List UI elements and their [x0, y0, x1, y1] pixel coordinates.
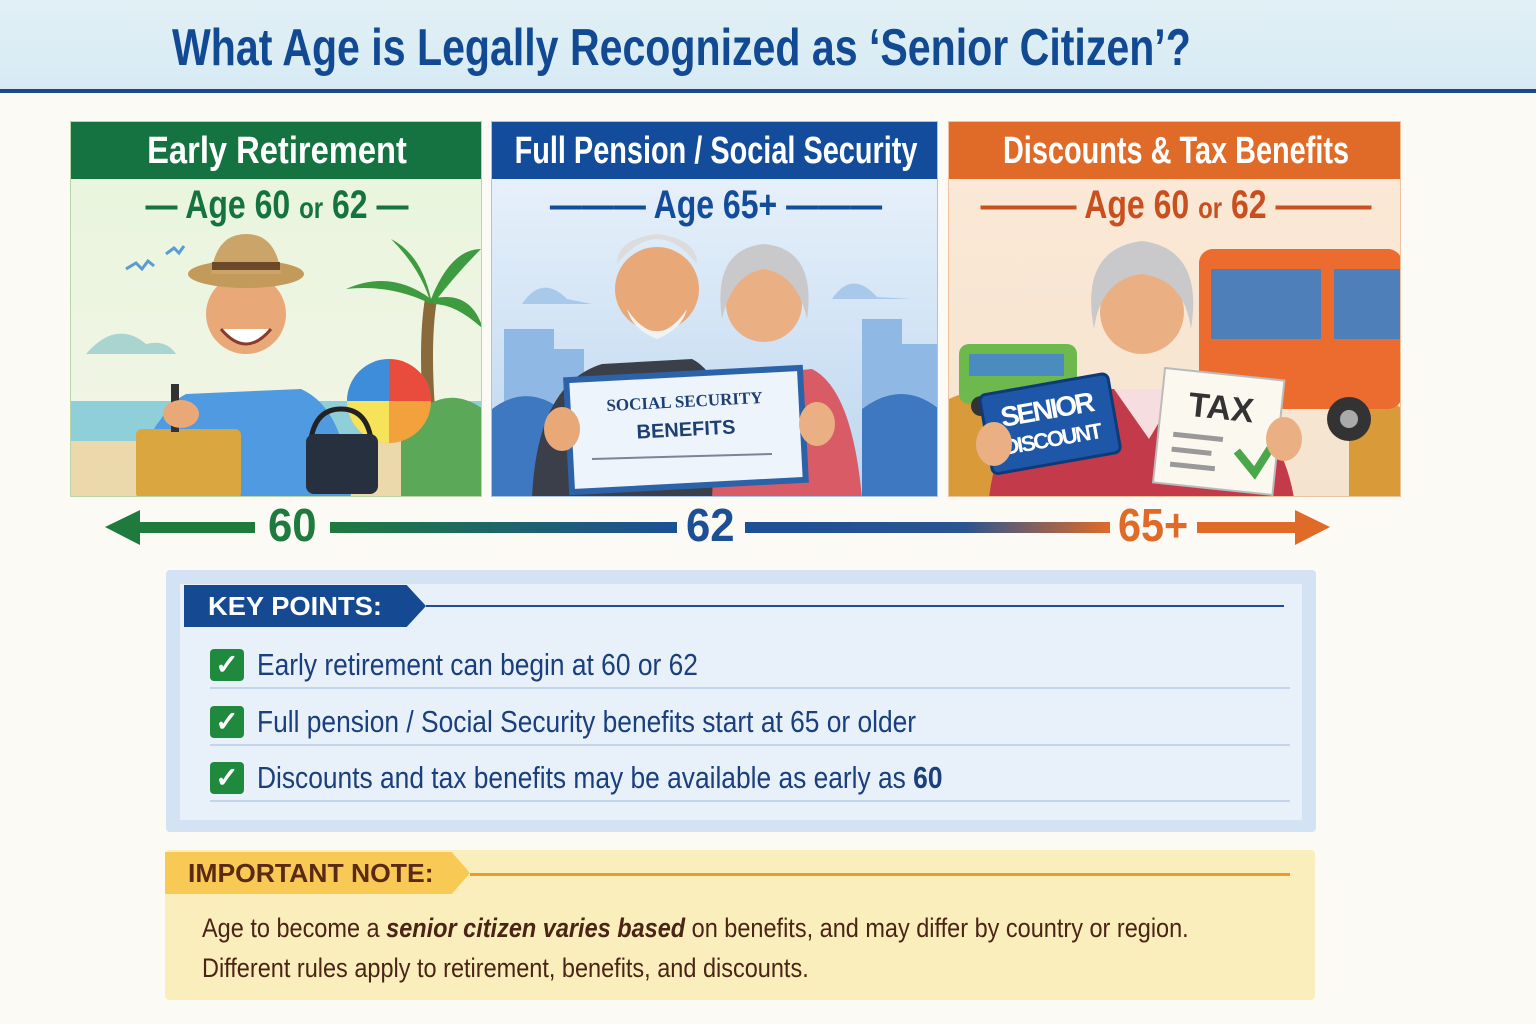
key point 2: ✓: [215, 706, 239, 737]
illustration: beach retiree: [71, 179, 481, 496]
timeline arrow: [105, 499, 1330, 551]
note text: Age to become a senior citizen varies based on benefits, and may differ by country or region.: [202, 913, 1189, 943]
illustration: senior discount: SENIOR: [998, 386, 1097, 433]
key points tab: KEY POINTS:: [208, 591, 382, 621]
heading: early retirement: [71, 122, 483, 179]
illustration: senior discount: [949, 179, 1400, 496]
heading: full pension: [492, 122, 939, 179]
header band: [0, 0, 1536, 93]
heading: discounts: Discounts & Tax Benefits: [1002, 130, 1349, 172]
heading: full pension: Full Pension / Social Security: [514, 130, 917, 172]
key point 2: Full pension / Social Security benefits start at 65 or older: [257, 704, 916, 739]
subheading: age 60 or 62: — Age 60 or 62 —: [146, 183, 408, 227]
key point 1: [210, 647, 1290, 689]
label: 62: 62: [686, 499, 735, 551]
key point 2: [210, 704, 1290, 746]
note text: Different rules apply to retirement, benefits, and discounts.: [202, 953, 809, 983]
key point 3: [210, 760, 1290, 802]
key point 1: ✓: [215, 649, 239, 680]
note tab: IMPORTANT NOTE:: [188, 858, 434, 888]
panel: important note: [165, 850, 1315, 1000]
panel: discounts: [948, 121, 1401, 497]
key points tab: [184, 585, 426, 627]
note text: [202, 913, 1189, 983]
panel: full pension: [491, 121, 938, 497]
illustration: senior discount: DISCOUNT: [1001, 418, 1105, 460]
key point 3: ✓: [215, 762, 239, 793]
illustration: couple with benefits: SOCIAL SECURITY: [606, 388, 763, 415]
label: 60: 60: [268, 499, 317, 551]
illustration: couple with benefits: BENEFITS: [636, 416, 736, 444]
label: 65+: 65+: [1118, 499, 1188, 551]
key point 3: Discounts and tax benefits may be available as early as 60: [257, 760, 942, 795]
subheading: age 65+: ——— Age 65+ ———: [549, 183, 882, 227]
panel: early retirement: [70, 121, 482, 497]
panel: key points: [166, 570, 1316, 832]
heading: early retirement: Early Retirement: [147, 130, 407, 172]
note tab: [165, 852, 470, 894]
title: What Age is Legally Recognized as ‘Senior Citizen’?: [172, 19, 1191, 77]
illustration: couple with benefits: [492, 179, 937, 496]
key point 1: Early retirement can begin at 60 or 62: [257, 647, 698, 682]
illustration: senior discount: TAX: [1187, 386, 1256, 430]
subheading: age 60 or 62: ——— Age 60 or 62 ———: [980, 183, 1371, 227]
heading: discounts: [949, 122, 1402, 179]
